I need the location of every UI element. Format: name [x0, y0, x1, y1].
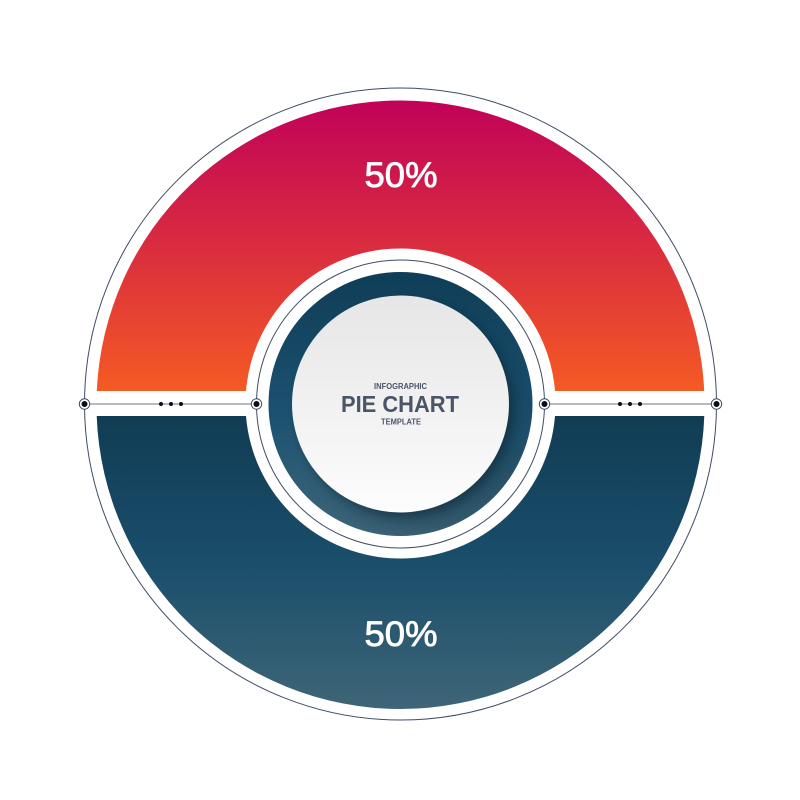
text: pie chart: PIE CHART [341, 391, 460, 417]
node: far right [711, 399, 722, 409]
text: template: TEMPLATE [381, 418, 422, 426]
center circle [292, 296, 509, 512]
node: inner right [539, 399, 550, 409]
outer thin ring [84, 88, 716, 720]
text: infographic: INFOGRAPHIC [374, 382, 427, 391]
pie chart infographic [78, 88, 722, 720]
right connector [539, 399, 722, 409]
segment: bottom 50% [97, 416, 704, 709]
center title [341, 382, 460, 426]
dark inner ring with shadow [268, 272, 532, 536]
node: far left [79, 399, 90, 409]
dots: right [618, 402, 642, 406]
label: top 50%: 50% [364, 156, 438, 195]
left connector [79, 399, 262, 409]
node: inner left [251, 399, 262, 409]
inner thin ring [256, 260, 544, 548]
segment: top 50% [97, 101, 704, 391]
dots: left [159, 402, 183, 406]
label: bottom 50%: 50% [364, 615, 438, 654]
